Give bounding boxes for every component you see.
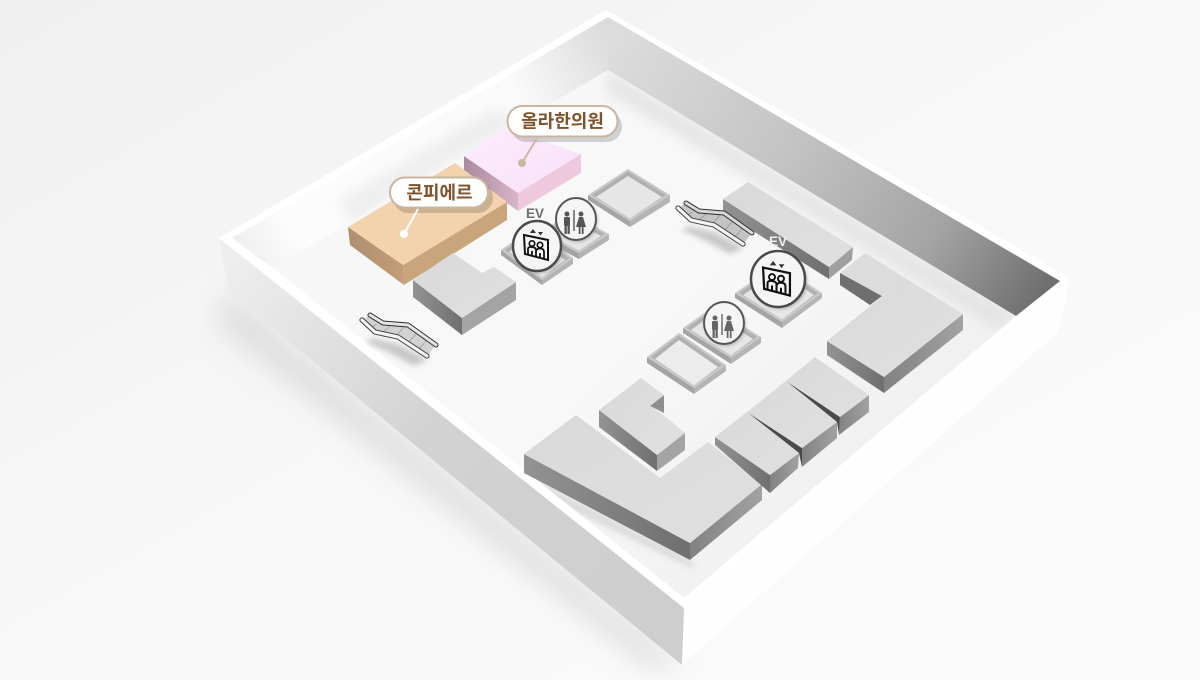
block: long back shop [723,182,853,279]
block: small notched shop [599,378,685,471]
block: large right shop [827,278,963,393]
wall shadow behind shops [346,113,507,218]
callout: 올라한의원: 올라한의원 [521,112,604,132]
outer right wall [682,278,1070,665]
building shell [218,10,1070,668]
escalator: lower left [362,315,436,366]
tray: empty upper [588,169,670,227]
floor [273,70,1016,598]
label: EV right: EV [769,234,787,249]
shop: 콘피에르 block [348,163,507,285]
tray: empty lower [647,333,726,394]
block: large corner shop [524,415,762,560]
sign: elevator left [513,221,563,273]
block: small right shop [840,253,905,305]
floor shadows [524,70,1016,570]
shop: 올라한의원 block [464,128,581,211]
escalator: upper right [678,203,752,254]
block: shop row unit 1 [715,412,799,493]
label: EV left: EV [526,206,544,221]
inner left wall [232,17,608,268]
tray: elevator right [735,264,822,328]
inner right wall [608,17,1060,316]
tray: elevator left [501,228,573,285]
block: shop row unit 2 [747,381,837,467]
block: gray L near escalator [413,253,516,335]
sign: elevator right [751,251,807,309]
block: shop row unit 3 [786,357,869,435]
outer left wall [219,238,684,665]
callout: 콘피에르 [390,178,493,238]
tray: restroom right [683,307,761,364]
top rim [219,10,1070,608]
callout: 올라한의원 [508,106,622,167]
sign: restroom left [556,198,598,242]
tray: restroom left [540,213,609,259]
callout: 콘피에르: 콘피에르 [406,183,473,203]
sign: restroom right [704,302,746,346]
ground shadow [218,290,682,668]
